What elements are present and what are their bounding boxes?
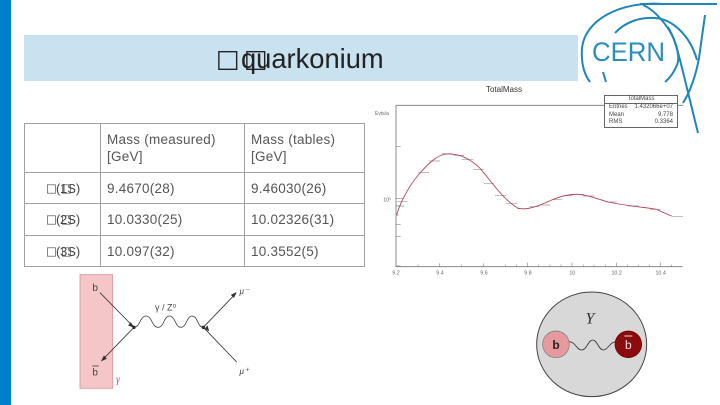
stats box: 0.3364 (655, 119, 673, 125)
table: masses: Mass (tables) (251, 132, 335, 147)
table: masses: □ (46, 212, 57, 226)
bound state diagram: Υ (586, 310, 597, 327)
table: masses: ( (56, 244, 60, 259)
stats box: Mean (609, 112, 624, 118)
table: masses: ( (56, 181, 60, 196)
table: masses: □ (46, 181, 57, 195)
table: masses: 10.097(32) (107, 244, 175, 259)
CERN logo: CERN (592, 37, 665, 67)
table: masses: [GeV] (251, 148, 287, 164)
table: masses: □ (61, 181, 72, 195)
title: □ (244, 44, 268, 73)
stats box: 1.432066e+07 (634, 104, 673, 110)
table: masses: 1S) (60, 181, 80, 196)
table: masses: Mass (measured) (107, 132, 216, 147)
table: masses: 10.0330(25) (107, 212, 183, 227)
Feynman diagram: μ⁻ (238, 287, 250, 297)
table: masses: 9.46030(26) (251, 181, 327, 196)
stats box: Entries (609, 104, 628, 110)
chart: total mass: 9.6 (480, 271, 488, 277)
Feynman diagram: b (92, 283, 98, 294)
table: masses: 10.3552(5) (251, 244, 319, 259)
stats box: RMS (609, 119, 622, 125)
chart: total mass: Evts/a (375, 111, 389, 117)
title: quarkonium (241, 43, 384, 74)
chart: total mass: TotalMass (486, 85, 522, 94)
table: masses (24, 123, 365, 267)
table: masses: □ (46, 244, 57, 258)
bound state diagram: b (552, 338, 560, 352)
chart: total mass: 10.4 (655, 271, 666, 277)
Feynman diagram: b (92, 367, 98, 378)
table: masses: □ (61, 212, 72, 226)
title: □ (216, 44, 240, 73)
Feynman diagram: μ⁺ (238, 367, 250, 377)
chart: total mass: 10.2 (611, 271, 622, 277)
title band (24, 35, 578, 81)
Feynman diagram: γ / Z⁰ (155, 303, 176, 313)
table: masses: 9.4670(28) (107, 181, 175, 196)
stats box (604, 95, 678, 128)
table: masses: [GeV] (107, 148, 143, 164)
chart: total mass: 9.2 (392, 271, 400, 277)
bound state diagram: b (625, 338, 632, 352)
table: masses: □ (61, 244, 72, 258)
chart: total mass: 10 (569, 271, 575, 277)
table: masses: ( (56, 212, 60, 227)
table: masses: 2S) (60, 212, 80, 227)
table: masses: 10.02326(31) (251, 212, 334, 227)
Feynman diagram: γ (116, 375, 121, 386)
chart: total mass: 9.8 (524, 271, 532, 277)
table: masses: 3S) (60, 244, 80, 259)
left accent bar (0, 0, 11, 405)
chart: total mass: 9.4 (436, 271, 444, 277)
stats box: 9.778 (658, 112, 673, 118)
stats box: TotalMass (627, 96, 654, 102)
chart: total mass: 10⁵ (383, 197, 391, 203)
